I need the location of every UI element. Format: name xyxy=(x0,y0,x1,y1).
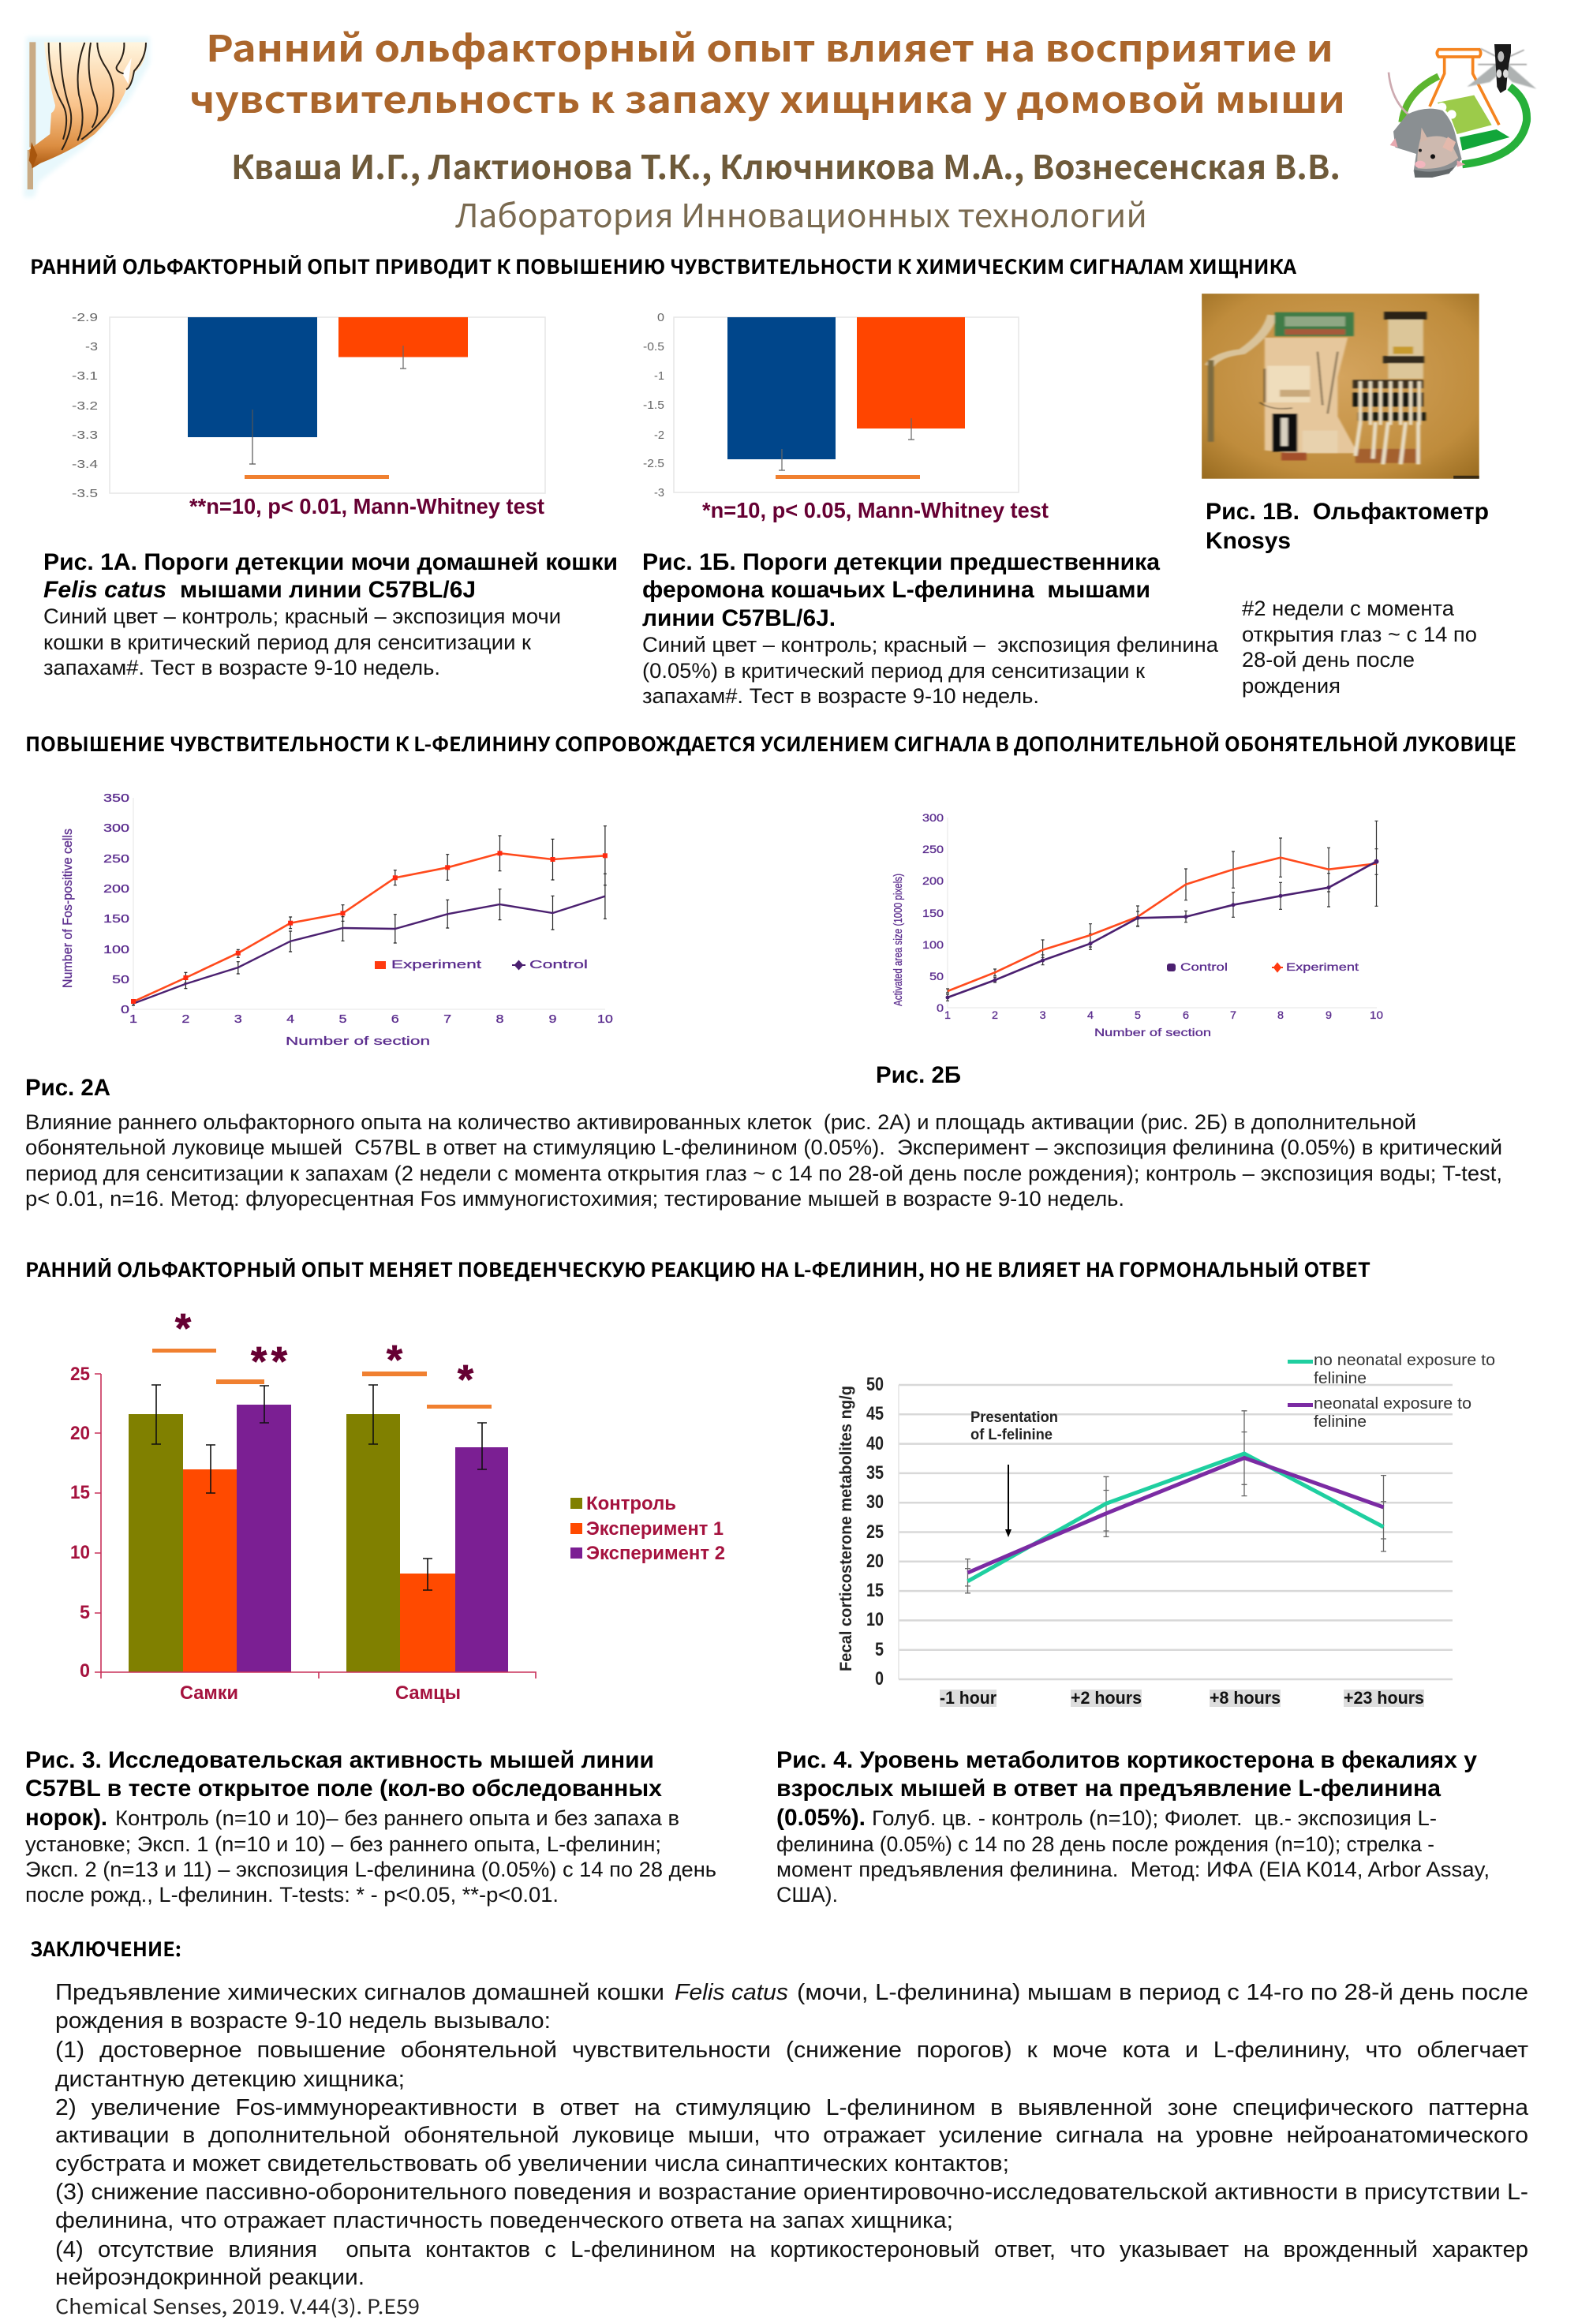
laboratory name: Лаборатория Инновационных технологий xyxy=(455,189,1147,237)
caption: figure 1A: запахам#. Тест в возрасте 9-10 недель. xyxy=(43,656,440,679)
chart: figure 1B thresholds: -0.5 xyxy=(643,340,664,354)
chart: figure 2A Fos-positive cells: 8 xyxy=(495,1012,503,1026)
chart: figure 2A Fos-positive cells: Number of Fos-positive cells xyxy=(60,829,75,988)
text block: conclusion: (3) снижение пассивно-оборонительного поведения и возрастание ориентировочно-исследовательской активности в присутствии L- xyxy=(55,2180,1528,2205)
text block: conclusion: нейроэндокринной реакции. xyxy=(55,2265,365,2290)
chart: figure 1A thresholds: -2.9 xyxy=(72,311,98,324)
caption: figure 1B: Синий цвет – контроль; красный – экспозиция фелинина xyxy=(642,633,1219,657)
caption: figure 1B: запахам#. Тест в возрасте 9-10 недель. xyxy=(642,684,1039,708)
caption: figure 3: Рис. 3. Исследовательская активность мышей линии xyxy=(25,1747,654,1773)
footnote: critical period: рождения xyxy=(1242,674,1341,698)
chart: figure 2B activated area: 1 xyxy=(944,1009,951,1021)
chart: figure 2A Fos-positive cells: 6 xyxy=(391,1012,399,1026)
chart: figure 4 corticosterone: Fecal corticosterone metabolites ng/g xyxy=(837,1386,855,1671)
chart: figure 2B activated area: 8 xyxy=(1277,1009,1284,1021)
chart: figure 2B activated area: 50 xyxy=(929,970,944,982)
heading: section 1: РАННИЙ ОЛЬФАКТОРНЫЙ ОПЫТ ПРИВОДИТ К ПОВЫШЕНИЮ ЧУВСТВИТЕЛЬНОСТИ К ХИМИЧЕСКИМ СИГНАЛАМ ХИЩНИКА xyxy=(30,252,1297,280)
chart: figure 4 corticosterone: 15 xyxy=(866,1580,884,1601)
citation: Chemical Senses, 2019. V.44(3). P.E59 xyxy=(55,2292,420,2320)
caption: figure 3: Контроль (n=10 и 10)– без раннего опыта и без запаха в xyxy=(115,1806,679,1830)
chart: figure 3 open field: 20 xyxy=(70,1423,90,1444)
label: figure 2A: Рис. 2А xyxy=(25,1075,110,1101)
chart: figure 4 corticosterone: +8 hours xyxy=(1210,1688,1281,1708)
title: Ранний ольфакторный опыт влияет на восприятие и xyxy=(206,21,1333,73)
chart: figure 3 open field: Эксперимент 2 xyxy=(586,1543,725,1564)
chart: figure 2B activated area: 10 xyxy=(1370,1009,1383,1021)
chart: figure 3 open field: * xyxy=(458,1357,474,1403)
chart: figure 2B activated area: 3 xyxy=(1040,1009,1046,1021)
chart: figure 4 corticosterone: felinine xyxy=(1314,1413,1367,1431)
chart: figure 4 corticosterone: 0 xyxy=(875,1668,884,1690)
caption: figure 2 description: обонятельной луковице мышей C57BL в ответ на стимуляцию L-фелинином (0.05%). Эксперимент – экспозиция фелинина (0.05%) в критический xyxy=(25,1136,1502,1159)
chart: figure 1B thresholds: *n=10, p< 0.05, Mann-Whitney test xyxy=(702,498,1049,522)
chart: figure 2A Fos-positive cells: 100 xyxy=(103,943,129,956)
chart: figure 1A thresholds: -3.4 xyxy=(72,458,98,471)
chart: figure 2B activated area: 0 xyxy=(937,1001,944,1014)
chart: figure 4 corticosterone: 50 xyxy=(866,1374,884,1395)
chart: figure 1A thresholds: -3 xyxy=(85,340,98,354)
chart: figure 2A Fos-positive cells: Experiment xyxy=(391,958,482,971)
caption: figure 4: (0.05%). xyxy=(776,1805,866,1831)
authors: Кваша И.Г., Лактионова Т.К., Ключникова М.А., Вознесенская В.В. xyxy=(231,141,1341,189)
chart: figure 4 corticosterone: neonatal exposure to xyxy=(1314,1395,1471,1413)
text block: conclusion: рождения в возрасте 9-10 недель вызывало: xyxy=(55,2008,551,2034)
chart: figure 1B thresholds: -3 xyxy=(654,486,664,500)
chart: figure 4 corticosterone: 5 xyxy=(875,1639,884,1660)
chart: figure 4 corticosterone: no neonatal exposure to xyxy=(1314,1352,1495,1369)
chart: figure 2A Fos-positive cells: Number of section xyxy=(286,1035,430,1048)
caption: figure 4: фелинина (0.05%) с 14 по 28 день после рождения (n=10); стрелка - xyxy=(776,1832,1434,1856)
chart: figure 2B activated area: Experiment xyxy=(1286,960,1359,973)
title xyxy=(189,21,1345,124)
chart: figure 2B activated area: Control xyxy=(1180,960,1228,973)
footnote: critical period: 28-ой день после xyxy=(1242,648,1415,672)
caption: figure 2 description: период для сенситизации к запахам (2 недели с момента открытия глаз ~ с 14 по 28-ой день после рождения); контроль – экспозиция воды; T-test, xyxy=(25,1162,1502,1185)
chart: figure 1A thresholds xyxy=(72,311,545,518)
caption: figure 1A: Рис. 1А. Пороги детекции мочи домашней кошки xyxy=(43,549,618,575)
caption: figure 3: норок). xyxy=(25,1805,107,1831)
chart: figure 2B activated area: 6 xyxy=(1183,1009,1189,1021)
chart: figure 4 corticosterone xyxy=(837,1352,1495,1708)
chart: figure 4 corticosterone: Presentation xyxy=(970,1409,1058,1426)
caption: figure 2 description xyxy=(25,1110,1502,1211)
caption: figure 1B: феромона кошачьих L-фелинина мышами xyxy=(642,577,1150,603)
chart: figure 4 corticosterone: felinine xyxy=(1314,1370,1367,1387)
chart: figure 2B activated area: 9 xyxy=(1326,1009,1332,1021)
chart: figure 1A thresholds: -3.3 xyxy=(72,428,98,442)
chart: figure 4 corticosterone: -1 hour xyxy=(940,1688,997,1708)
text block: conclusion: субстрата и может свидетельствовать об увеличении числа синаптических контактов; xyxy=(55,2151,1009,2176)
chart: figure 1B thresholds: -2 xyxy=(654,428,664,442)
caption: figure 1A: Felis catus xyxy=(43,577,166,603)
chart: figure 2A Fos-positive cells: 350 xyxy=(103,792,129,805)
chart: figure 4 corticosterone: +2 hours xyxy=(1071,1688,1142,1708)
caption: figure 1A xyxy=(43,549,618,679)
chart: figure 3 open field: 0 xyxy=(80,1660,90,1682)
chart: figure 2A Fos-positive cells: 200 xyxy=(103,882,129,896)
caption: figure 1B xyxy=(642,549,1219,708)
caption: figure 1A: мышами линии C57BL/6J xyxy=(180,577,476,603)
text block: conclusion: дистантную детекцию хищника; xyxy=(55,2067,405,2092)
chart: figure 2B activated area: 4 xyxy=(1087,1009,1094,1021)
chart: figure 4 corticosterone: +23 hours xyxy=(1344,1688,1424,1708)
chart: figure 2B activated area: 300 xyxy=(922,811,944,824)
chart: figure 4 corticosterone: of L-felinine xyxy=(970,1427,1053,1443)
heading: conclusion: ЗАКЛЮЧЕНИЕ: xyxy=(30,1934,181,1963)
chart: figure 3 open field: 25 xyxy=(70,1364,90,1385)
text block: conclusion: (1) достоверное повышение обонятельной чувствительности (снижение порогов) к моче кота и L-фелинину, что облегчает xyxy=(55,2038,1528,2063)
chart: figure 2B activated area: 5 xyxy=(1135,1009,1141,1021)
chart: figure 3 open field: * xyxy=(387,1338,403,1383)
chart: figure 3 open field: ** xyxy=(251,1339,288,1385)
chart: figure 3 open field xyxy=(70,1306,725,1704)
chart: figure 1A thresholds: -3.2 xyxy=(72,399,98,413)
footnote: critical period: открытия глаз ~ с 14 по xyxy=(1242,623,1477,646)
footnote: critical period: #2 недели с момента xyxy=(1242,597,1455,620)
chart: figure 4 corticosterone: 45 xyxy=(866,1403,884,1424)
chart: figure 2A Fos-positive cells: 300 xyxy=(103,821,129,835)
chart: figure 2A Fos-positive cells: 50 xyxy=(112,973,129,986)
title: чувствительность к запаху хищника у домовой мыши xyxy=(189,72,1345,124)
caption: figure 4: США). xyxy=(776,1883,838,1907)
caption: figure 1B: (0.05%) в критический период для сенситизации к xyxy=(642,659,1145,683)
chart: figure 4 corticosterone: 10 xyxy=(866,1609,884,1630)
caption: figure 4: взрослых мышей в ответ на предъявление L-фелинина xyxy=(776,1776,1441,1802)
chart: figure 3 open field: Самцы xyxy=(395,1682,461,1704)
caption: figure 3: C57BL в тесте открытое поле (кол-во обследованных xyxy=(25,1776,662,1802)
caption: figure 1A: Синий цвет – контроль; красный – экспозиция мочи xyxy=(43,604,561,628)
chart: figure 4 corticosterone: 40 xyxy=(866,1433,884,1454)
text block: conclusion: активации в дополнительной обонятельной луковице мыши, что отражает усиление сигнала на уровне нейроанатомического xyxy=(55,2123,1528,2148)
heading: section 2: ПОВЫШЕНИЕ ЧУВСТВИТЕЛЬНОСТИ К L-ФЕЛИНИНУ СОПРОВОЖДАЕТСЯ УСИЛЕНИЕМ СИГНАЛА В ДОПОЛНИТЕЛЬНОЙ ОБОНЯТЕЛЬНОЙ ЛУКОВИЦЕ xyxy=(25,729,1516,758)
caption: figure 1C xyxy=(1206,499,1489,554)
caption: figure 2 description: p< 0.01, n=16. Метод: флуоресцентная Fos иммуногистохимия; тестирование мышей в возрасте 9-10 недель. xyxy=(25,1187,1124,1211)
text block: conclusion: фелинина, что отражает пластичность поведенческого ответа на запах хищника; xyxy=(55,2208,953,2233)
chart: figure 4 corticosterone: 35 xyxy=(866,1462,884,1484)
caption: figure 1B: Рис. 1Б. Пороги детекции предшественника xyxy=(642,549,1160,575)
chart: figure 2B activated area: 200 xyxy=(922,874,944,887)
caption: figure 3: после рожд., L-фелинин. T-tests: * - p<0.05, **-p<0.01. xyxy=(25,1883,559,1907)
caption: figure 1C: Knosys xyxy=(1206,528,1291,554)
chart: figure 3 open field: Самки xyxy=(180,1682,238,1704)
chart: figure 4 corticosterone: 20 xyxy=(866,1551,884,1572)
chart: figure 2A Fos-positive cells: 9 xyxy=(549,1012,557,1026)
chart: figure 2A Fos-positive cells: 150 xyxy=(103,912,129,926)
chart: figure 2A Fos-positive cells: 2 xyxy=(181,1012,189,1026)
chart: figure 1A thresholds: **n=10, p< 0.01, Mann-Whitney test xyxy=(189,494,544,518)
chart: figure 1B thresholds: -1.5 xyxy=(643,399,664,412)
icon: flask with mouse and fly xyxy=(1389,44,1536,178)
chart: figure 2B activated area: 7 xyxy=(1230,1009,1236,1021)
chart: figure 2B activated area: 150 xyxy=(922,907,944,919)
chart: figure 1B thresholds: 0 xyxy=(657,311,664,324)
chart: figure 2A Fos-positive cells: 1 xyxy=(129,1012,137,1026)
caption: figure 1B: линии C57BL/6J. xyxy=(642,605,836,631)
chart: figure 3 open field: 5 xyxy=(80,1602,90,1623)
chart: figure 2A Fos-positive cells: 7 xyxy=(443,1012,451,1026)
chart: figure 2A Fos-positive cells: 0 xyxy=(121,1003,129,1016)
text block: conclusion: Предъявление химических сигналов домашней кошки xyxy=(55,1980,664,2005)
icon: theatre curtain xyxy=(24,37,150,197)
chart: figure 1A thresholds: -3.1 xyxy=(72,369,98,383)
caption: figure 1C: Рис. 1В. Ольфактометр xyxy=(1206,499,1489,525)
chart: figure 1B thresholds: -2.5 xyxy=(643,457,664,470)
chart: figure 3 open field: 10 xyxy=(70,1542,90,1563)
text block: conclusion xyxy=(55,1980,1529,2290)
caption: figure 2 description: Влияние раннего ольфакторного опыта на количество активированных клеток (рис. 2А) и площадь активации (рис. 2Б) в дополнительной xyxy=(25,1110,1416,1134)
caption: figure 3: установке; Эксп. 1 (n=10 и 10) – без раннего опыта, L-фелинин; xyxy=(25,1832,661,1856)
label: figure 2B: Рис. 2Б xyxy=(876,1062,961,1088)
photo: Knosys olfactometer xyxy=(1202,294,1479,479)
chart: figure 4 corticosterone: 25 xyxy=(866,1521,884,1543)
chart: figure 3 open field: 15 xyxy=(70,1482,90,1503)
chart: figure 2B activated area: 2 xyxy=(992,1009,998,1021)
text block: conclusion: (мочи, L-фелинина) мышам в период с 14-го по 28-й день после xyxy=(797,1980,1528,2005)
caption: figure 4: Голуб. цв. - контроль (n=10); Фиолет. цв.- экспозиция L- xyxy=(872,1806,1437,1830)
chart: figure 3 open field: Контроль xyxy=(586,1493,676,1514)
caption: figure 1A: кошки в критический период для сенситизации к xyxy=(43,631,531,654)
chart: figure 1A thresholds: -3.5 xyxy=(72,487,98,500)
chart: figure 2A Fos-positive cells: 5 xyxy=(339,1012,347,1026)
text block: conclusion: Felis catus xyxy=(675,1980,788,2005)
chart: figure 3 open field: Эксперимент 1 xyxy=(586,1518,724,1540)
chart: figure 2A Fos-positive cells: Control xyxy=(529,958,588,971)
chart: figure 3 open field: * xyxy=(175,1306,192,1352)
chart: figure 2B activated area: Number of section xyxy=(1094,1026,1211,1039)
caption: figure 4: Рис. 4. Уровень метаболитов кортикостерона в фекалиях у xyxy=(776,1747,1477,1773)
chart: figure 2A Fos-positive cells: 250 xyxy=(103,852,129,866)
chart: figure 2B activated area: 100 xyxy=(922,938,944,951)
caption: figure 3: Эксп. 2 (n=13 и 11) – экспозиция L-фелинина (0.05%) с 14 по 28 день xyxy=(25,1858,716,1881)
caption: figure 4 xyxy=(776,1747,1490,1907)
chart: figure 1B thresholds xyxy=(643,311,1049,522)
chart: figure 2A Fos-positive cells xyxy=(60,792,613,1048)
chart: figure 4 corticosterone: 30 xyxy=(866,1491,884,1513)
chart: figure 2A Fos-positive cells: 10 xyxy=(597,1012,613,1026)
chart: figure 1B thresholds: -1 xyxy=(654,369,664,383)
chart: figure 2B activated area xyxy=(892,811,1383,1039)
chart: figure 2A Fos-positive cells: 3 xyxy=(234,1012,242,1026)
chart: figure 2B activated area: 250 xyxy=(922,843,944,855)
chart: figure 2A Fos-positive cells: 4 xyxy=(286,1012,294,1026)
text block: conclusion: (4) отсутствие влияния опыта контактов с L-фелинином на кортикостероновый ответ, что указывает на врожденный характер xyxy=(55,2237,1528,2262)
heading: section 3: РАННИЙ ОЛЬФАКТОРНЫЙ ОПЫТ МЕНЯЕТ ПОВЕДЕНЧЕСКУЮ РЕАКЦИЮ НА L-ФЕЛИНИН, НО НЕ ВЛИЯЕТ НА ГОРМОНАЛЬНЫЙ ОТВЕТ xyxy=(25,1255,1370,1283)
caption: figure 4: момент предъявления фелинина. Метод: ИФА (EIA K014, Arbor Assay, xyxy=(776,1858,1490,1881)
chart: figure 2B activated area: Activated area size (1000 pixels) xyxy=(892,874,905,1006)
footnote: critical period xyxy=(1242,597,1477,698)
text block: conclusion: 2) увеличение Fos-иммунореактивности в ответ на стимуляцию L-фелинином в выявленной зоне специфического паттерна xyxy=(55,2095,1529,2120)
caption: figure 3 xyxy=(25,1747,716,1907)
